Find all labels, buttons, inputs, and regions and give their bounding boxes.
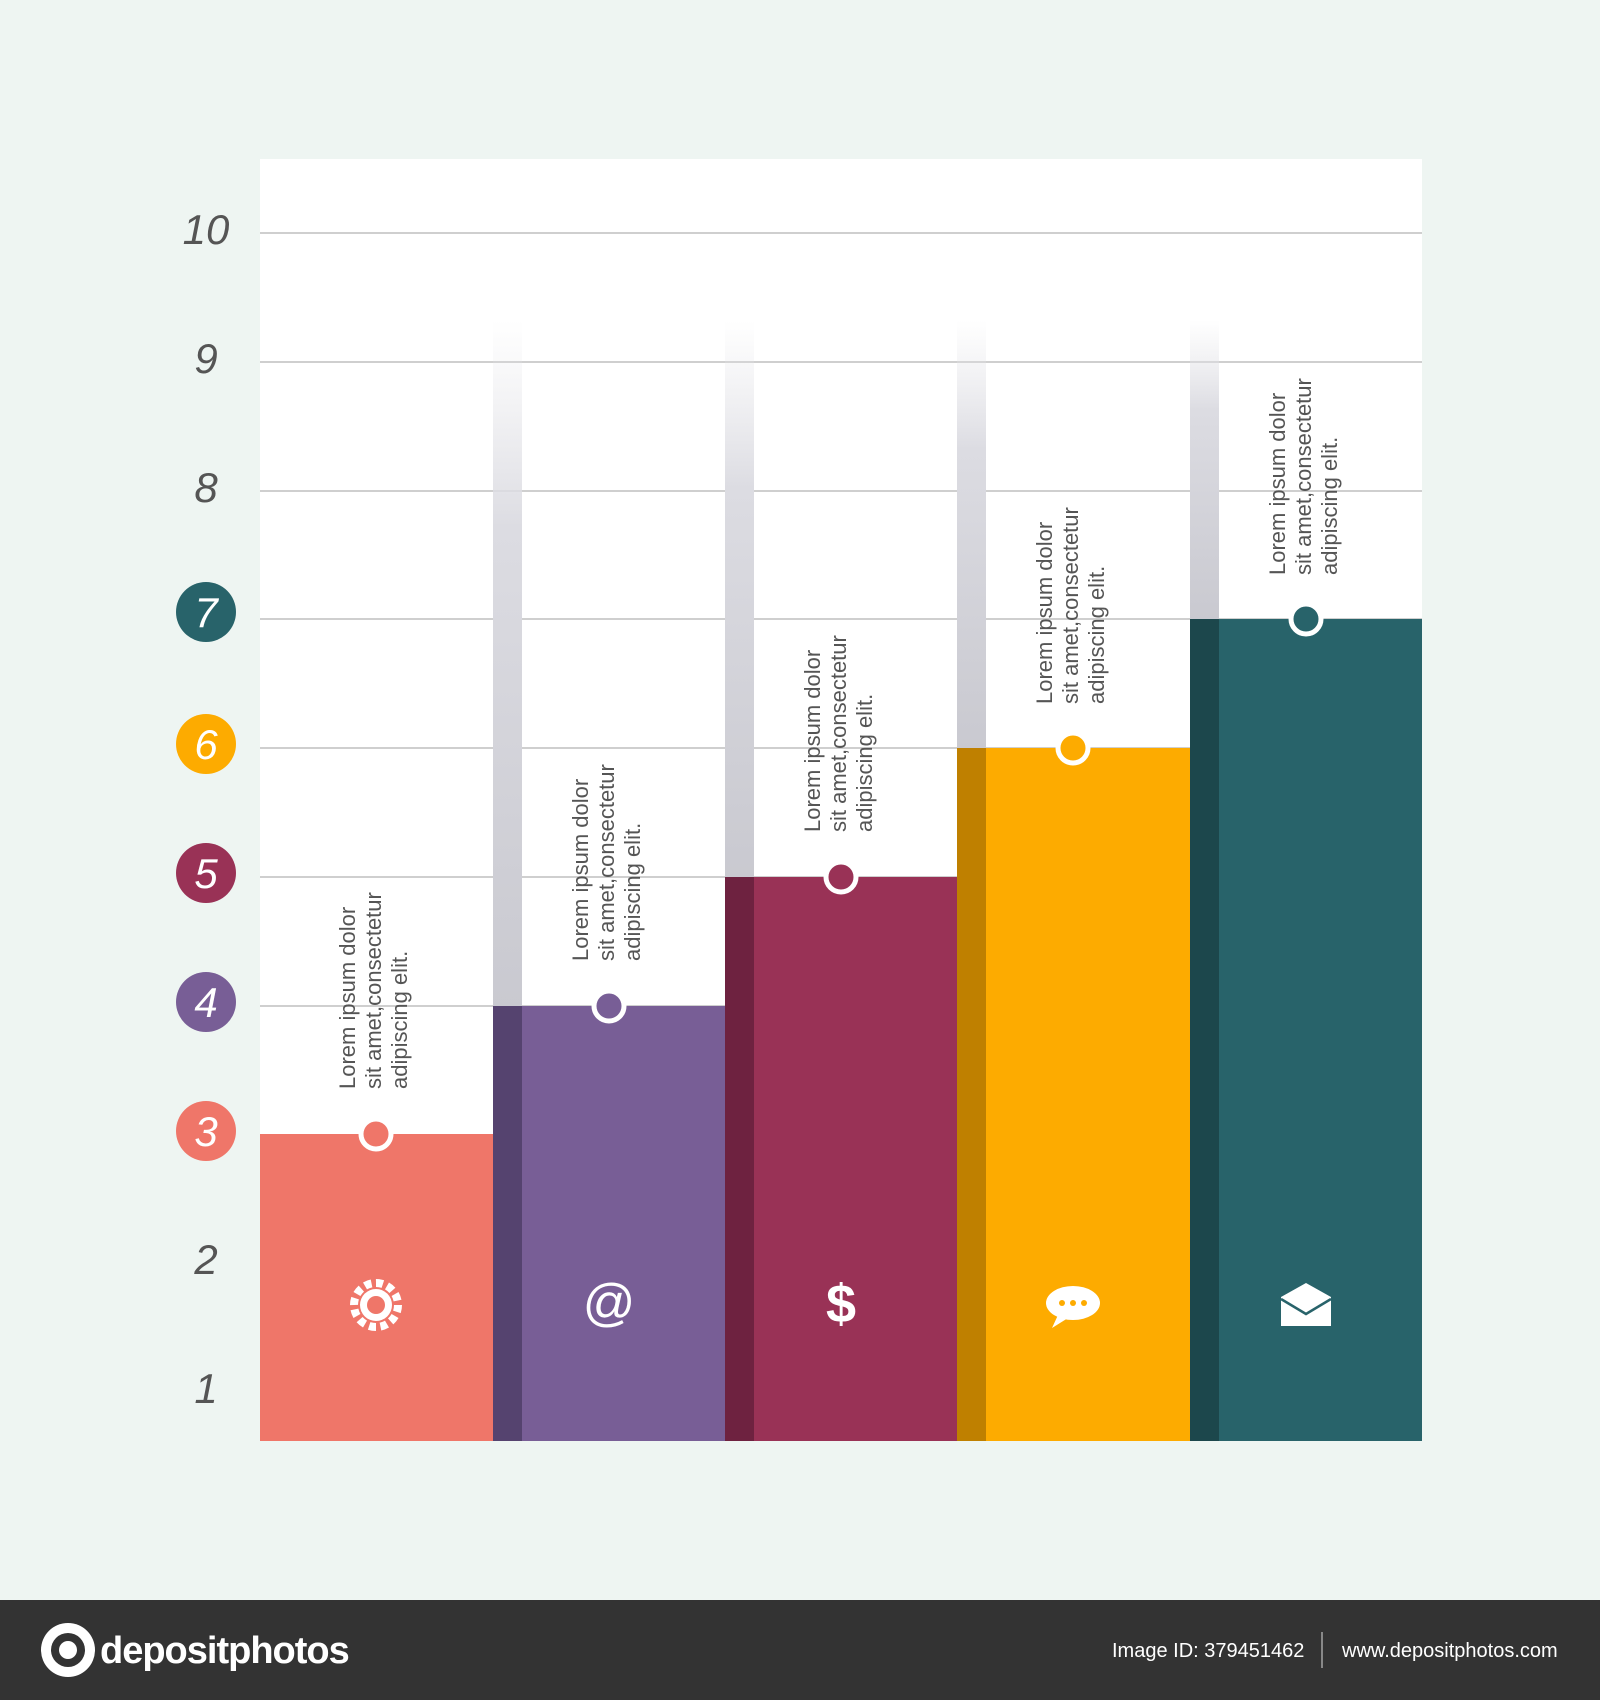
y axis labels: 7 [194,589,219,636]
bar 5 [1190,604,1422,1441]
y axis labels: 9 [194,335,218,382]
footer bar: www.depositphotos.com [1341,1640,1558,1662]
bar labels: sit amet,consectetur [1058,507,1083,704]
bar 2 [493,991,725,1441]
y axis labels: 10 [183,206,230,253]
bar labels: Lorem ipsum dolor [1032,522,1057,704]
y axis labels: 8 [194,464,218,511]
y axis labels: 3 [194,1108,218,1155]
y axis labels: 1 [194,1365,218,1412]
y axis labels: 4 [194,979,218,1026]
bar 3: $ [826,1274,856,1334]
bar labels: sit amet,consectetur [826,635,851,832]
bar labels [335,378,1342,1089]
bar labels: adipiscing elit. [852,694,877,832]
bar labels: adipiscing elit. [620,823,645,961]
bar labels: adipiscing elit. [1084,566,1109,704]
bar labels: adipiscing elit. [1317,437,1342,575]
bar labels: Lorem ipsum dolor [1265,393,1290,575]
bar labels: sit amet,consectetur [1291,378,1316,575]
footer bar: Image ID: 379451462 [1112,1640,1304,1662]
bar labels: Lorem ipsum dolor [800,650,825,832]
y axis labels [176,206,236,1412]
footer bar [0,1600,1600,1700]
y axis labels: 2 [193,1236,218,1283]
bar labels: Lorem ipsum dolor [335,907,360,1089]
bar 4 [957,733,1190,1441]
bar labels: sit amet,consectetur [594,764,619,961]
bar 2: @ [583,1274,635,1332]
y axis labels: 6 [194,721,218,768]
bar labels: sit amet,consectetur [361,892,386,1089]
bar labels: adipiscing elit. [387,951,412,1089]
y axis labels: 5 [194,850,218,897]
bar labels: Lorem ipsum dolor [568,779,593,961]
footer bar: depositphotos [100,1630,349,1672]
chart panel [260,159,1422,1441]
bar 3 [725,862,957,1441]
bar 1 [260,1119,493,1441]
